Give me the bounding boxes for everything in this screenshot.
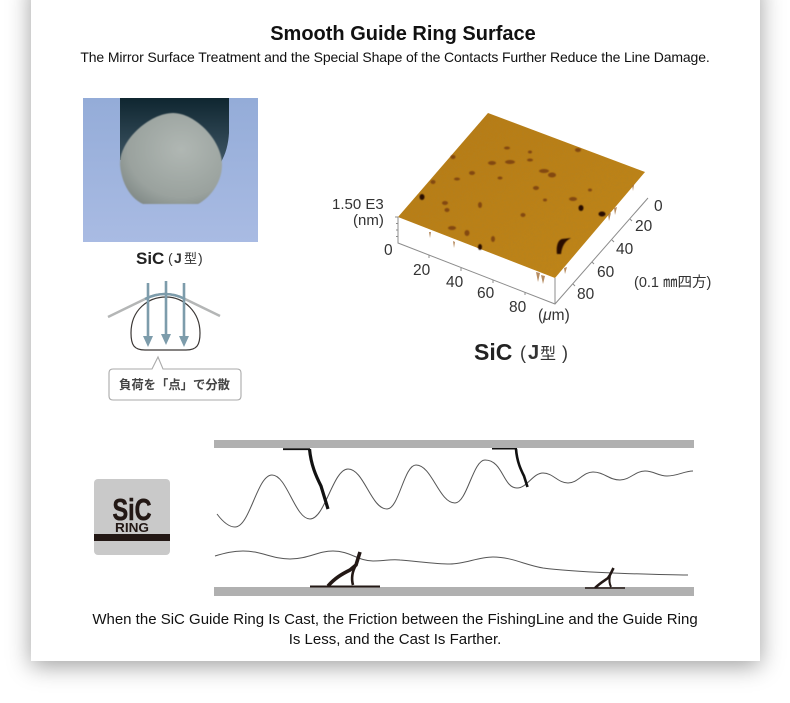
label suffix: (J type) right: J (528, 342, 539, 364)
axis labels: (nm) (353, 212, 384, 229)
axis labels: 20 (413, 262, 431, 279)
guide bottom one (310, 552, 380, 586)
axis labels: 80 (509, 299, 527, 316)
label: SiC (J type) right: SiC (474, 339, 512, 365)
label suffix: (J type) right: 型 (540, 345, 556, 363)
label suffix: (J type) left: J (174, 250, 182, 266)
axis labels: 60 (597, 264, 615, 281)
label suffix: (J type) left: ( (168, 250, 173, 266)
guide top two (492, 449, 528, 487)
axis labels: 0 (654, 198, 663, 215)
callout: load dispersed at points: 負荷を「点」で分散 (119, 377, 230, 392)
caption: When the SiC Guide Ring Is Cast, the Friction between the FishingLine and the Guide Ring (92, 611, 698, 628)
guide bottom two (585, 568, 625, 588)
axis labels: 80 (577, 286, 595, 303)
label suffix: (J type) right: ( (520, 343, 526, 363)
guide top one (283, 449, 328, 509)
icon: SiC RING badge: SiC (112, 492, 152, 527)
axis labels: 40 (616, 241, 634, 258)
callout: load dispersed at points (109, 357, 241, 400)
diagram: load dispersal (108, 281, 220, 350)
icon: SiC RING badge: RING (115, 520, 149, 535)
label: SiC (J type) left: SiC (136, 249, 164, 268)
icon: SiC RING badge (94, 479, 170, 555)
label suffix: (J type) right: ) (562, 343, 568, 363)
axis labels: 40 (446, 274, 464, 291)
guide rail top (214, 440, 694, 448)
axis labels: 0 (384, 242, 393, 259)
title: Smooth Guide Ring Surface (270, 23, 536, 45)
photo: SiC J-type ring (83, 98, 258, 242)
label suffix: (J type) left: ) (198, 250, 203, 266)
3D surface chart (395, 113, 648, 304)
axis labels: (μm) (538, 307, 570, 324)
axis labels: 1.50 E3 (332, 196, 384, 213)
axis labels: 60 (477, 285, 495, 302)
axis labels: 20 (635, 218, 653, 235)
caption: Is Less, and the Cast Is Farther. (289, 630, 501, 648)
guide rail bottom (214, 587, 694, 596)
caption (92, 611, 698, 648)
subtitle: The Mirror Surface Treatment and the Special Shape of the Contacts Further Reduce the Line Damage. (80, 49, 710, 65)
fishing line: wavy (before) (217, 460, 693, 527)
fishing line: straight (after) (215, 551, 688, 575)
label suffix: (J type) left: 型 (184, 251, 197, 266)
axis labels: (0.1 ㎜四方) (634, 274, 711, 291)
axis labels (332, 196, 711, 324)
